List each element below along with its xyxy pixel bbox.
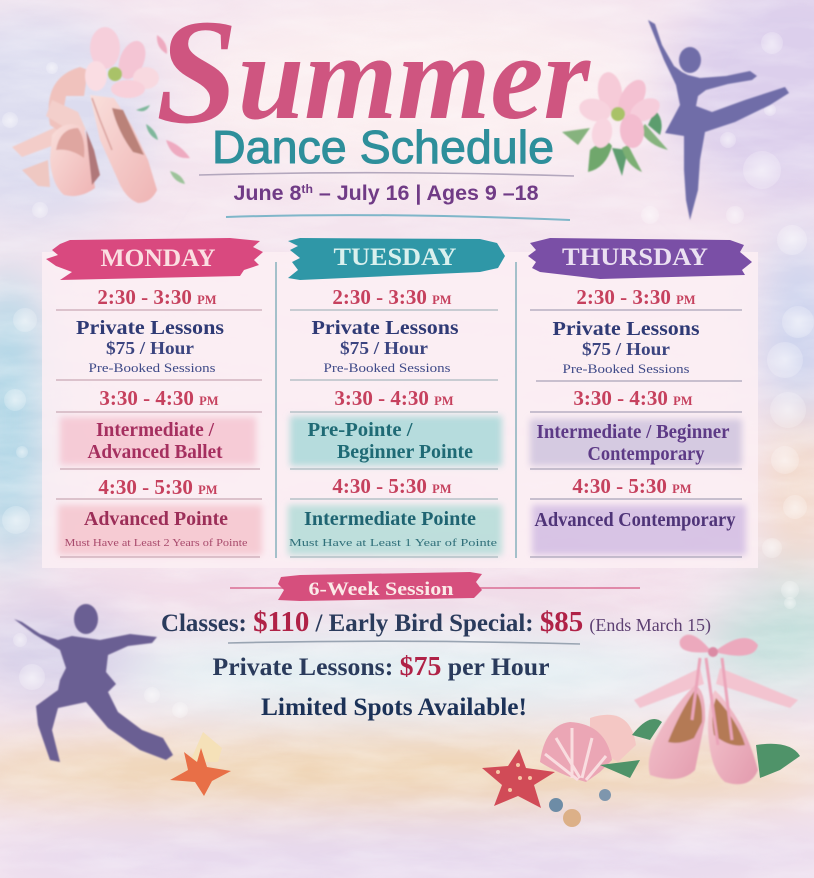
column: Thursday: Advanced Contemporary — [534, 509, 736, 531]
title: Dance Schedule: Dance Schedule — [212, 121, 554, 173]
ballet shoes bottom right — [634, 635, 798, 784]
column dividers — [276, 262, 516, 558]
date line: th — [301, 182, 313, 196]
column: Monday: $75 / Hour — [106, 338, 194, 358]
header: Thursday — [528, 238, 752, 279]
date line: June 8 — [234, 182, 300, 205]
title: Summer: ummer — [238, 10, 591, 145]
column: Tuesday: Beginner Pointe — [337, 441, 473, 463]
column: Thursday: Pre-Booked Sessions — [562, 361, 690, 376]
header: Monday: MONDAY — [100, 245, 216, 272]
6-week session banner: 6-Week Session — [308, 579, 454, 600]
column: Tuesday: Must Have at Least 1 Year of Pointe — [289, 537, 497, 549]
schedule panel — [42, 238, 758, 568]
header: Tuesday — [288, 238, 505, 280]
row washes — [530, 419, 746, 555]
row washes — [58, 417, 262, 555]
column: Monday — [46, 238, 263, 557]
title — [156, 0, 591, 173]
column: Thursday: Private Lessons — [552, 318, 700, 340]
6-week session banner — [230, 572, 640, 601]
date line: – July 16 | Ages 9 –18 — [313, 182, 539, 205]
column: Thursday: 3:30 - 4:30 PM — [573, 386, 693, 410]
red starfish — [482, 749, 555, 808]
rule — [228, 641, 580, 644]
limited spots line: Limited Spots Available! — [261, 694, 527, 721]
column: Tuesday: $75 / Hour — [340, 338, 428, 358]
header: Tuesday: TUESDAY — [334, 244, 456, 271]
column: Monday: 2:30 - 3:30 PM — [97, 285, 217, 309]
column: Tuesday: Pre-Pointe / — [308, 419, 413, 441]
column: Tuesday: 3:30 - 4:30 PM — [334, 386, 454, 410]
column: Monday: Advanced Ballet — [88, 441, 223, 463]
ribbons — [12, 127, 60, 157]
column: Thursday: $75 / Hour — [582, 339, 670, 359]
column: Monday: 4:30 - 5:30 PM — [98, 475, 218, 499]
flower top right — [562, 71, 668, 176]
date rule top — [199, 173, 574, 176]
header: Monday — [46, 238, 263, 280]
bokeh dots — [2, 32, 814, 718]
column: Monday: 3:30 - 4:30 PM — [99, 386, 219, 410]
column: Tuesday: Pre-Booked Sessions — [324, 360, 450, 375]
row washes — [288, 416, 502, 555]
ballerina silhouette bottom left — [14, 604, 173, 762]
column: Tuesday: Private Lessons — [312, 317, 459, 339]
pricing text — [161, 606, 711, 721]
column: Thursday: 2:30 - 3:30 PM — [576, 285, 696, 309]
column: Monday: Advanced Pointe — [84, 508, 228, 530]
column: Monday: Pre-Booked Sessions — [88, 360, 216, 375]
orange starfish — [170, 732, 231, 796]
header: Thursday: THURSDAY — [562, 244, 708, 271]
column: Monday: Intermediate / — [96, 419, 214, 441]
shell — [540, 715, 636, 782]
column: Tuesday — [288, 238, 505, 557]
private lessons line: Private Lessons: $75 per Hour — [212, 651, 550, 681]
date rule bottom — [226, 215, 570, 220]
column: Monday: Private Lessons — [76, 317, 224, 339]
flower top left — [85, 27, 190, 184]
column: Thursday: Intermediate / Beginner — [536, 421, 730, 443]
column: Thursday — [528, 238, 752, 557]
column: Monday: Must Have at Least 2 Years of Pointe — [64, 537, 248, 549]
column: Thursday: Contemporary — [588, 443, 704, 465]
column: Tuesday: 2:30 - 3:30 PM — [332, 285, 452, 309]
column: Thursday: 4:30 - 5:30 PM — [572, 474, 692, 498]
ballerina silhouette top right — [648, 20, 789, 220]
classes line: Classes: $110 / Early Bird Special: $85 (Ends March 15) — [161, 606, 711, 638]
leaves and pebbles — [549, 719, 800, 827]
column: Tuesday: Intermediate Pointe — [304, 508, 476, 530]
ballet shoes top left — [12, 67, 157, 203]
column: Tuesday: 4:30 - 5:30 PM — [332, 474, 452, 498]
